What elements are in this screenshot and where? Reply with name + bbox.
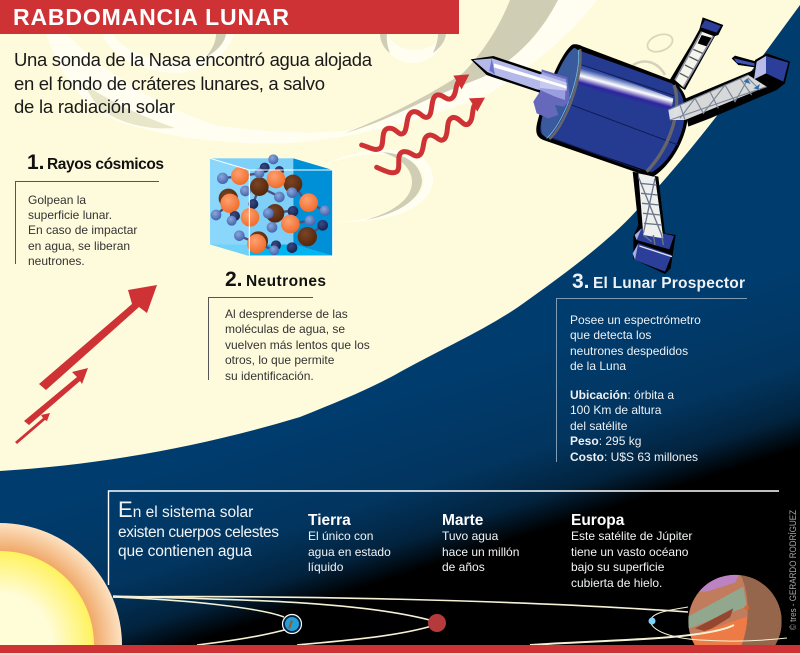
Europa text: cubierta de hielo. <box>571 576 662 590</box>
right antenna arm <box>668 53 790 127</box>
Tierra text <box>308 512 391 574</box>
Europa text: Europa <box>571 512 625 529</box>
Tierra text: El único con <box>308 529 373 543</box>
bottom red bar <box>0 645 800 653</box>
section 3: el Lunar Prospector: Peso: 295 kg <box>570 434 641 448</box>
title bar <box>0 0 459 34</box>
Marte text: Marte <box>442 512 484 529</box>
top antenna arm <box>669 17 723 90</box>
Europa text: bajo su superficie <box>571 560 665 574</box>
bottom edge <box>0 653 800 655</box>
section 3: el Lunar Prospector: neutrones despedidos <box>570 344 688 358</box>
section 1: rayos cósmicos <box>16 151 164 268</box>
section 2: neutrones <box>208 268 370 383</box>
Marte text: hace un millón <box>442 545 519 559</box>
section 2: neutrones: Al desprenderse de las <box>225 307 348 321</box>
Jupiter <box>687 573 783 645</box>
cylinder body <box>536 44 688 177</box>
solar system intro: En el sistema solar <box>118 497 253 522</box>
section 3: el Lunar Prospector: 100 Km de altura <box>570 403 662 417</box>
bottom antenna arm <box>633 172 676 274</box>
Marte text: Tuvo agua <box>442 529 499 543</box>
probe <box>471 56 570 118</box>
Europa text <box>571 512 692 590</box>
Tierra text: agua en estado <box>308 545 391 559</box>
title: RABDOMANCIA LUNAR <box>13 4 289 30</box>
solar system intro <box>118 497 279 560</box>
section 1: rayos cósmicos: en agua, se liberan <box>28 239 130 253</box>
section 3: el Lunar Prospector: Posee un espectrómetro <box>570 313 701 327</box>
section 2: neutrones: moléculas de agua, se <box>225 322 345 336</box>
Marte text <box>442 512 519 574</box>
Lunar Prospector satellite <box>471 17 790 274</box>
water molecule cube <box>210 154 333 256</box>
section 2: neutrones: 2. <box>225 268 243 291</box>
section 3: el Lunar Prospector: de la Luna <box>570 359 626 373</box>
section 1: rayos cósmicos: En caso de impactar <box>28 223 137 237</box>
section 3: el Lunar Prospector: Costo: U$S 63 millones <box>570 450 698 464</box>
credit: © tres - GERARDO RODRÍGUEZ <box>788 510 798 630</box>
planet: Tierra <box>282 614 302 634</box>
section 3: el Lunar Prospector: del satélite <box>570 419 628 433</box>
intro text: de la radiación solar <box>14 96 175 117</box>
section 1: rayos cósmicos: Golpean la <box>28 193 86 207</box>
crater swirls <box>45 0 675 222</box>
Europa text: Este satélite de Júpiter <box>571 529 692 543</box>
wavy neutron arrows <box>362 74 485 173</box>
section 1: rayos cósmicos: superficie lunar. <box>28 208 112 222</box>
Tierra text: Tierra <box>308 512 351 529</box>
section 3: el Lunar Prospector <box>556 270 747 464</box>
solar system intro: que contienen agua <box>118 543 252 560</box>
section 1: rayos cósmicos: Rayos cósmicos <box>47 156 164 173</box>
Marte text: de años <box>442 560 485 574</box>
section 1: rayos cósmicos: neutrones. <box>28 254 85 268</box>
section 3: el Lunar Prospector: Ubicación: órbita a <box>570 388 674 402</box>
section 2: neutrones: vuelven más lentos que los <box>225 338 370 352</box>
intro text: Una sonda de la Nasa encontró agua alojada <box>14 49 373 70</box>
section 3: el Lunar Prospector: que detecta los <box>570 328 651 342</box>
planet: Marte <box>428 614 446 632</box>
bottom frame <box>108 491 779 585</box>
section 3: el Lunar Prospector: 3. <box>572 270 590 293</box>
sun <box>0 523 122 645</box>
lunar surface <box>0 0 800 471</box>
section 2: neutrones: su identificación. <box>225 369 314 383</box>
section 1: rayos cósmicos: 1. <box>27 151 45 174</box>
Europa text: tiene un vasto océano <box>571 545 689 559</box>
section 2: neutrones: otros, lo que permite <box>225 353 335 367</box>
intro text <box>14 49 373 117</box>
section 3: el Lunar Prospector: El Lunar Prospector <box>593 275 745 292</box>
moon: Europa <box>648 618 656 624</box>
orbits <box>113 596 787 645</box>
cosmic ray arrows <box>15 285 157 444</box>
solar system intro: existen cuerpos celestes <box>118 524 279 541</box>
intro text: en el fondo de cráteres lunares, a salvo <box>14 73 325 94</box>
Tierra text: líquido <box>308 560 344 574</box>
section 2: neutrones: Neutrones <box>246 273 326 290</box>
